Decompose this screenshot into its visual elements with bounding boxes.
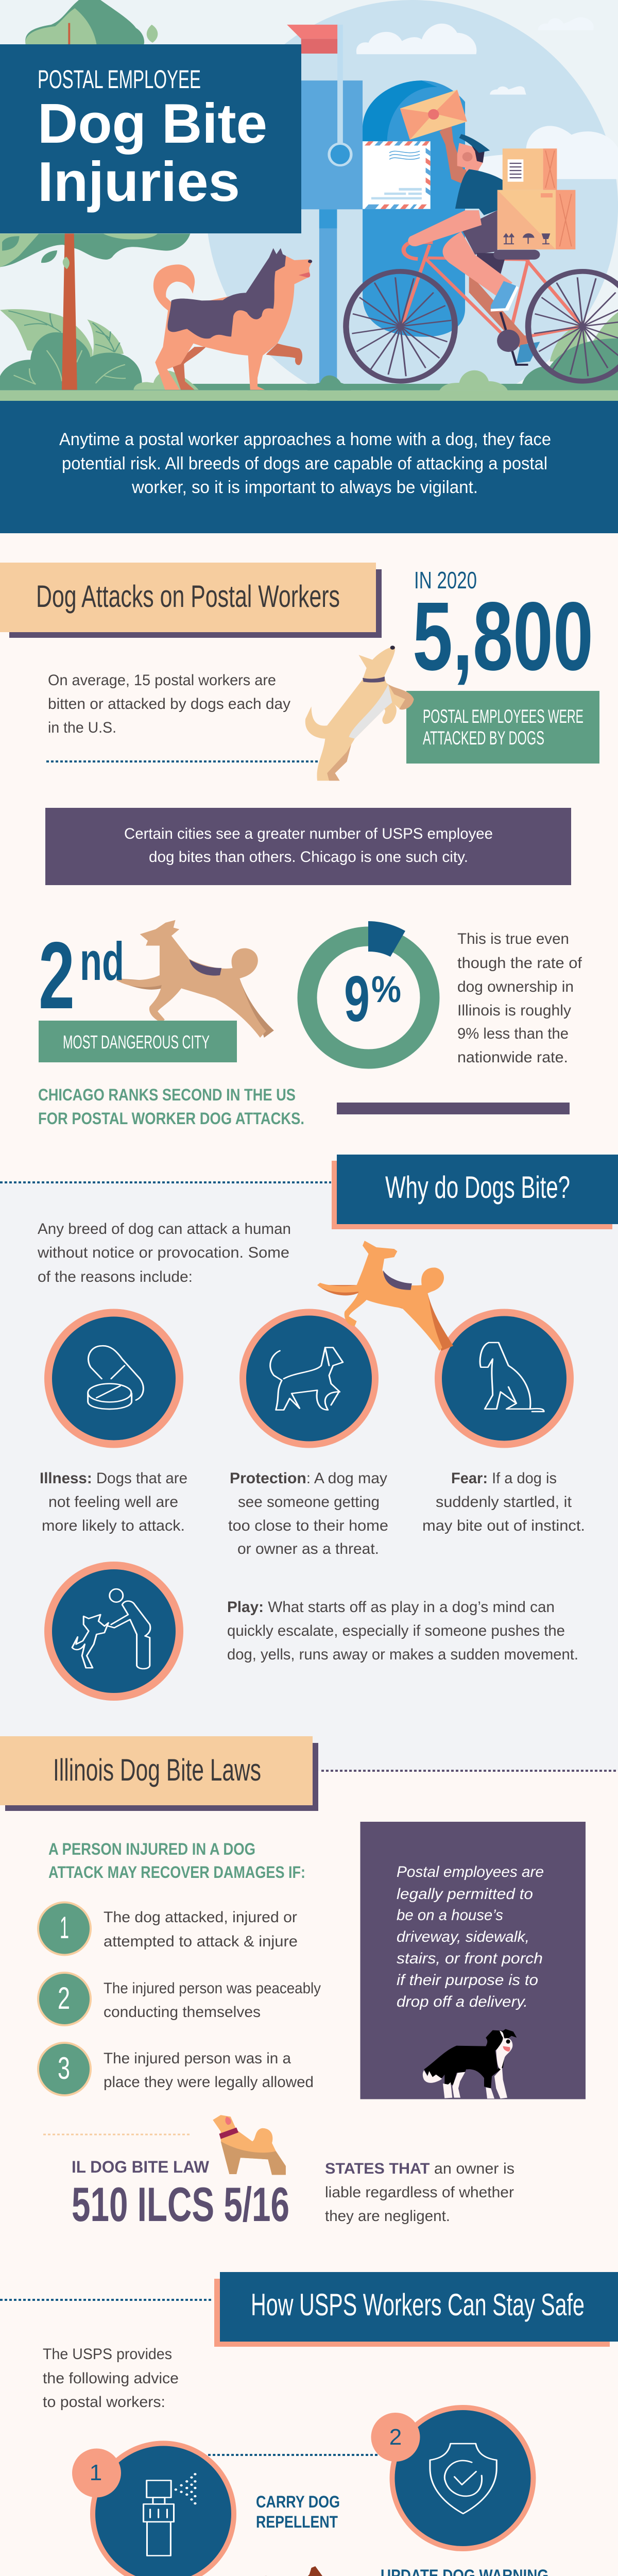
text: fear: suddenly startled, it bbox=[436, 1494, 572, 1511]
panel: legal permission callout: if their purpose is to bbox=[397, 1972, 538, 1989]
text: damages heading bbox=[48, 1840, 305, 1882]
callout: postal employees attacked: ATTACKED BY DOGS bbox=[423, 727, 544, 749]
text: carry repellent: CARRY DOG bbox=[256, 2493, 340, 2511]
panel: legal permission callout: stairs, or front porch bbox=[397, 1950, 543, 1967]
text: USPS advice intro bbox=[43, 2346, 179, 2411]
list item 3: 3 bbox=[58, 2051, 70, 2086]
heading: Illinois Dog Bite Laws bbox=[0, 1736, 318, 1811]
panel: intro band bbox=[0, 401, 618, 533]
text: IL dog bite law: IL DOG BITE LAW bbox=[72, 2158, 210, 2176]
text: why intro bbox=[37, 1221, 291, 1285]
panel: legal permission callout: Postal employees are bbox=[397, 1863, 544, 1880]
text: states that: STATES THAT an owner is bbox=[325, 2160, 514, 2177]
text: damages heading: A PERSON INJURED IN A DOG bbox=[48, 1840, 255, 1858]
panel: intro band: Anytime a postal worker approaches a home with a dog, they face bbox=[59, 430, 551, 449]
text: dog ownership note: 9% less than the bbox=[457, 1025, 569, 1042]
icon: border collie bbox=[423, 2029, 517, 2098]
icon: tree canopy and bushes bbox=[0, 233, 199, 390]
callout: most dangerous city: MOST DANGEROUS CITY bbox=[63, 1031, 210, 1053]
text: protection bbox=[228, 1470, 388, 1557]
text: illness: Illness: Dogs that are bbox=[40, 1470, 187, 1487]
icon: mailbox bbox=[287, 25, 465, 385]
icon: repellent circle bbox=[72, 2441, 236, 2576]
list item 1 bbox=[38, 1902, 298, 1955]
list item 3: The injured person was in a bbox=[104, 2050, 291, 2067]
text: protection: or owner as a threat. bbox=[237, 1540, 379, 1557]
list item 2: The injured person was peaceably bbox=[104, 1980, 321, 1997]
panel: title block bbox=[0, 44, 301, 233]
stat: 2nd: 2 bbox=[39, 923, 75, 1029]
list item 1: 1 bbox=[60, 1910, 69, 1945]
text: IL dog bite law bbox=[72, 2158, 289, 2231]
icon: brown dog bbox=[252, 2566, 327, 2576]
text: carry repellent bbox=[256, 2493, 340, 2531]
icon: airmail envelope bbox=[363, 141, 431, 209]
panel: legal permission callout: drop off a delivery. bbox=[397, 1993, 528, 2010]
text: dog ownership note: nationwide rate. bbox=[457, 1049, 568, 1066]
text: dog ownership note: Illinois is roughly bbox=[457, 1002, 571, 1019]
stat: 5,800 in 2020: IN 2020 bbox=[414, 567, 477, 594]
panel: legal permission callout: legally permitted to bbox=[397, 1886, 533, 1903]
icon: repellent circle: 1 bbox=[90, 2460, 102, 2485]
text: states that: liable regardless of whether bbox=[325, 2184, 514, 2201]
chart: 9 percent donut bbox=[307, 921, 430, 1059]
icon: clouds bbox=[356, 17, 618, 179]
list item 3: place they were legally allowed bbox=[104, 2074, 314, 2091]
text: daily average: On average, 15 postal workers are bbox=[48, 672, 276, 689]
list item 2 bbox=[38, 1973, 321, 2025]
text: Chicago ranks second: FOR POSTAL WORKER DOG ATTACKS. bbox=[38, 1109, 304, 1128]
panel: intro band: potential risk. All breeds of dogs are capable of attacking a postal bbox=[62, 454, 547, 473]
panel: intro band: worker, so it is important to always be vigilant. bbox=[131, 478, 478, 497]
icon: envelope held by rider bbox=[400, 90, 467, 140]
icon: warning cards circle bbox=[371, 2405, 536, 2551]
text: Chicago ranks second: CHICAGO RANKS SECOND IN THE US bbox=[38, 1086, 296, 1104]
stat: 2nd bbox=[39, 923, 124, 1029]
panel: cities callout: Certain cities see a greater number of USPS employee bbox=[124, 825, 493, 842]
text: fear bbox=[422, 1470, 585, 1534]
icon: jumping orange dog bbox=[317, 1241, 453, 1351]
list item 1: attempted to attack & injure bbox=[104, 1933, 298, 1950]
text: play: Play: What starts off as play in a dog’s mind can bbox=[227, 1599, 555, 1616]
heading: Why do Dogs Bite? bbox=[332, 1155, 618, 1229]
text: fear: Fear: If a dog is bbox=[451, 1470, 557, 1487]
stat: 2nd: nd bbox=[80, 931, 124, 992]
list item 3 bbox=[38, 2043, 314, 2095]
icon: fear circle bbox=[435, 1309, 574, 1448]
text: daily average bbox=[48, 672, 290, 736]
text: dog ownership note: dog ownership in bbox=[457, 978, 574, 995]
text: states that: they are negligent. bbox=[325, 2208, 450, 2225]
icon: bicycle and rider bbox=[346, 90, 618, 381]
text: IL dog bite law: 510 ILCS 5/16 bbox=[72, 2177, 289, 2231]
heading: Dog Attacks on Postal Workers: Dog Attacks on Postal Workers bbox=[36, 579, 340, 614]
icon: play circle bbox=[44, 1562, 183, 1701]
text: USPS advice intro: the following advice bbox=[43, 2370, 179, 2387]
text: play: quickly escalate, especially if someone pushes the bbox=[227, 1622, 565, 1639]
icon: standing tan dog bbox=[305, 646, 414, 781]
text: states that bbox=[325, 2160, 514, 2225]
heading: Dog Attacks on Postal Workers bbox=[0, 563, 382, 638]
icon: illness circle bbox=[44, 1309, 183, 1448]
text: carry repellent: REPELLENT bbox=[256, 2513, 338, 2531]
panel: cities callout bbox=[45, 808, 571, 885]
chart: 9 percent donut: % bbox=[371, 969, 401, 1010]
main title bbox=[38, 92, 267, 213]
text: protection: too close to their home bbox=[228, 1517, 388, 1534]
text: fear: may bite out of instinct. bbox=[422, 1517, 585, 1534]
heading: How USPS Workers Can Stay Safe bbox=[214, 2272, 618, 2347]
text: dog ownership note: This is true even bbox=[457, 930, 569, 947]
main title: Dog Bite bbox=[38, 92, 267, 155]
icon: protection circle bbox=[239, 1309, 379, 1448]
chart: 9 percent donut: 9 bbox=[344, 963, 370, 1035]
panel: cities callout: dog bites than others. Chicago is one such city. bbox=[149, 849, 468, 866]
list item 2: 2 bbox=[58, 1981, 70, 2015]
heading: Illinois Dog Bite Laws: Illinois Dog Bite Laws bbox=[53, 1753, 261, 1787]
icon: hero dog bbox=[153, 248, 312, 390]
text: protection: see someone getting bbox=[238, 1494, 380, 1511]
panel: legal permission callout: driveway, sidewalk, bbox=[397, 1928, 529, 1945]
text: why intro: of the reasons include: bbox=[38, 1268, 193, 1285]
text: play bbox=[227, 1599, 578, 1663]
list item 2: conducting themselves bbox=[104, 2004, 261, 2021]
text: play: dog, yells, runs away or makes a sudden movement. bbox=[227, 1646, 578, 1663]
text: USPS advice intro: to postal workers: bbox=[43, 2394, 165, 2411]
panel: legal permission callout: be on a house’s bbox=[397, 1907, 503, 1924]
icon: leaping tan dog bbox=[116, 920, 274, 1038]
title kicker: POSTAL EMPLOYEE bbox=[38, 65, 201, 94]
callout: postal employees attacked bbox=[406, 691, 599, 764]
icon: ground bbox=[0, 370, 618, 401]
text: Chicago ranks second bbox=[38, 1086, 304, 1128]
callout: most dangerous city bbox=[39, 1021, 237, 1062]
text: illness bbox=[40, 1470, 187, 1534]
text: daily average: in the U.S. bbox=[48, 719, 116, 736]
panel: legal permission callout bbox=[360, 1822, 586, 2099]
icon: tree behind title bbox=[25, 0, 158, 44]
text: daily average: bitten or attacked by dogs each day bbox=[48, 696, 290, 713]
text: illness: more likely to attack. bbox=[42, 1517, 185, 1534]
text: why intro: without notice or provocation. Some bbox=[37, 1244, 289, 1261]
icon: front bush behind wheel bbox=[522, 312, 618, 384]
panel: hero illustration bbox=[0, 0, 618, 412]
list item 1: The dog attacked, injured or bbox=[104, 1909, 297, 1926]
text: protection: Protection: A dog may bbox=[230, 1470, 387, 1487]
icon: pug bbox=[213, 2115, 286, 2175]
icon: wheels bbox=[346, 272, 618, 381]
text: dog ownership note: though the rate of bbox=[457, 955, 582, 972]
icon: parcels bbox=[497, 148, 575, 249]
text: dog ownership note bbox=[457, 930, 582, 1066]
text: USPS advice intro: The USPS provides bbox=[43, 2346, 172, 2363]
main title: Injuries bbox=[38, 150, 240, 213]
icon: warning cards circle: 2 bbox=[389, 2425, 402, 2450]
text: damages heading: ATTACK MAY RECOVER DAMAGES IF: bbox=[48, 1863, 305, 1882]
text: illness: not feeling well are bbox=[48, 1494, 178, 1511]
text: why intro: Any breed of dog can attack a human bbox=[38, 1221, 291, 1238]
